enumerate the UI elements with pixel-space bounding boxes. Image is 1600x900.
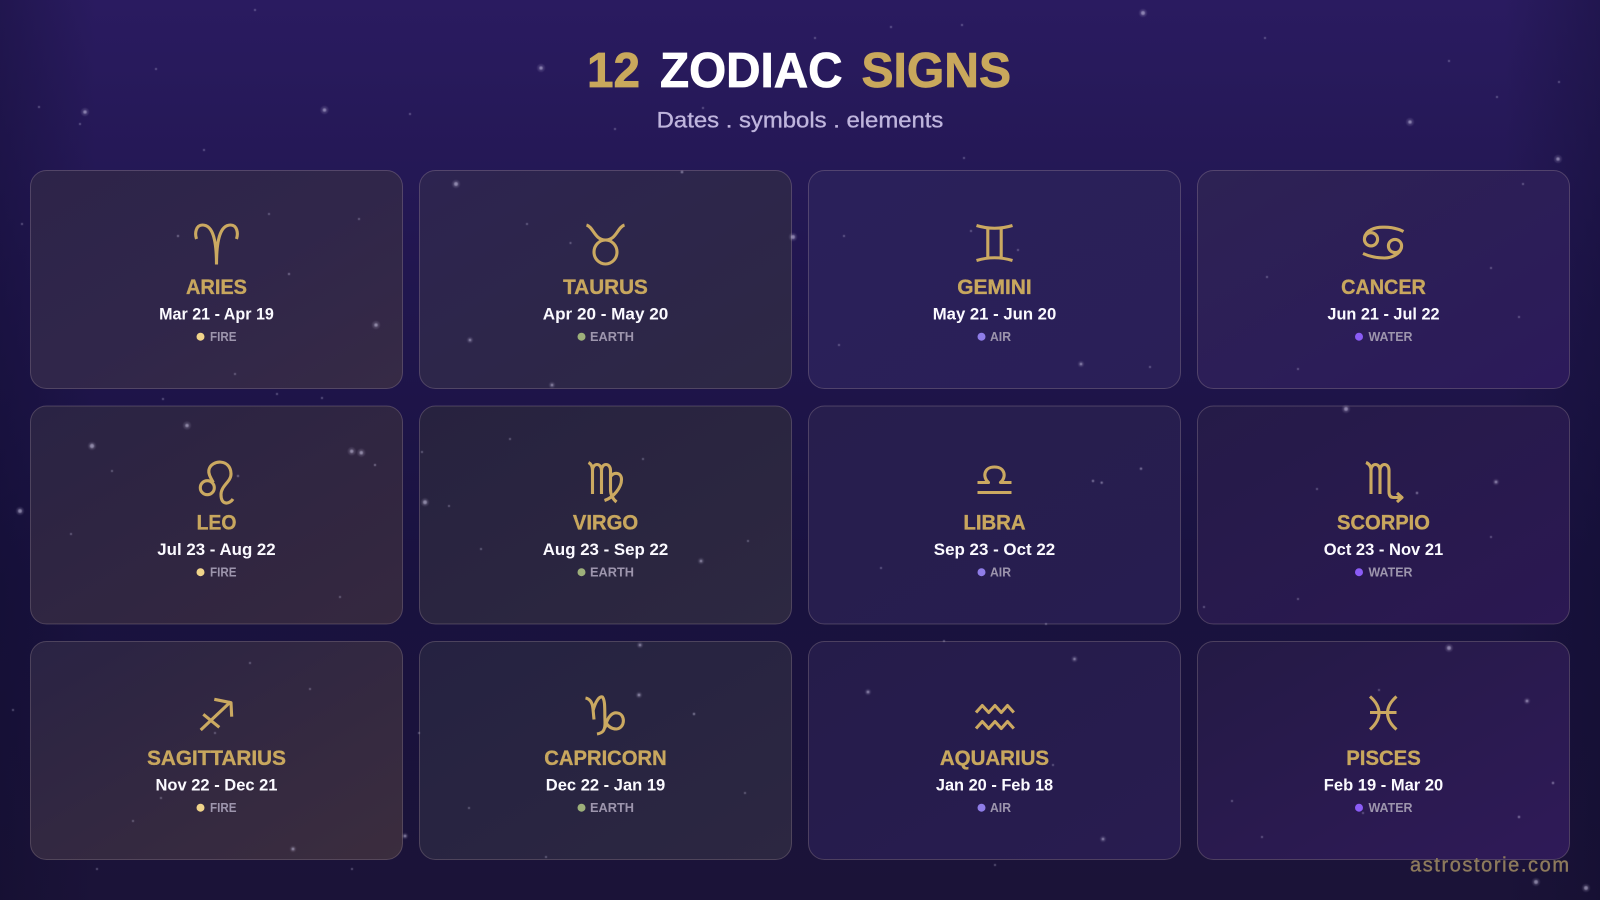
card background xyxy=(808,170,1180,388)
icon: Aquarius symbol xyxy=(976,706,1014,728)
icon: Capricorn symbol xyxy=(586,697,623,734)
panel: Cancer xyxy=(1198,170,1570,388)
element tag: EARTH xyxy=(590,801,634,815)
date range: May 21 - Jun 20 xyxy=(933,305,1056,324)
element tag xyxy=(196,566,236,580)
title: 12 xyxy=(587,43,640,98)
card background xyxy=(420,406,792,624)
sign name: VIRGO xyxy=(573,512,638,534)
subtitle: Dates . symbols . elements xyxy=(657,108,943,133)
element tag xyxy=(978,566,1011,580)
card background xyxy=(30,642,402,860)
element tag xyxy=(196,330,236,344)
sign name: AQUARIUS xyxy=(940,747,1049,770)
icon: Taurus symbol xyxy=(586,225,624,264)
panel: Taurus xyxy=(420,170,792,388)
date range: Dec 22 - Jan 19 xyxy=(546,776,665,795)
sign name: TAURUS xyxy=(563,276,648,299)
title xyxy=(587,43,1011,98)
title: ZODIAC xyxy=(660,43,842,98)
panel: Sagittarius xyxy=(30,642,402,860)
element tag: EARTH xyxy=(590,330,634,344)
icon: Aries symbol xyxy=(196,225,237,264)
element tag: WATER xyxy=(1368,801,1412,815)
element tag: FIRE xyxy=(210,330,236,344)
icon: Gemini symbol xyxy=(976,226,1012,260)
date range: Oct 23 - Nov 21 xyxy=(1324,540,1443,559)
icon: Sagittarius symbol xyxy=(201,699,232,730)
element tag xyxy=(978,801,1011,815)
date range: Aug 23 - Sep 22 xyxy=(543,540,668,559)
date range: Jun 21 - Jul 22 xyxy=(1327,305,1440,324)
sign name: LIBRA xyxy=(963,512,1026,534)
element tag: WATER xyxy=(1368,566,1412,580)
sign name: CAPRICORN xyxy=(544,747,667,770)
sign name: PISCES xyxy=(1346,747,1421,770)
card background xyxy=(30,170,402,388)
title: SIGNS xyxy=(862,43,1011,98)
icon: Cancer symbol xyxy=(1363,227,1404,258)
date range: Sep 23 - Oct 22 xyxy=(934,540,1055,559)
sign name: LEO xyxy=(197,512,236,534)
panel: Leo xyxy=(30,406,402,624)
panel: Aries xyxy=(30,170,402,388)
panel: Scorpio xyxy=(1198,406,1570,624)
card background xyxy=(420,170,792,388)
element tag xyxy=(196,801,236,815)
panel: Capricorn xyxy=(420,642,792,860)
icon: Scorpio symbol xyxy=(1366,462,1402,502)
icon: Pisces symbol xyxy=(1370,696,1396,730)
icon: Leo symbol xyxy=(200,462,233,503)
panel: Virgo xyxy=(420,406,792,624)
panel: Libra xyxy=(808,406,1180,624)
element tag xyxy=(978,330,1011,344)
panel: Gemini xyxy=(808,170,1180,388)
element tag: FIRE xyxy=(210,566,236,580)
panel: Pisces xyxy=(1198,642,1570,860)
sign name: SAGITTARIUS xyxy=(147,747,286,770)
element tag: AIR xyxy=(990,566,1011,580)
card background xyxy=(808,642,1180,860)
element tag: AIR xyxy=(990,330,1011,344)
date range: Apr 20 - May 20 xyxy=(543,305,668,324)
card background xyxy=(30,406,402,624)
element tag: FIRE xyxy=(210,801,236,815)
watermark: astrostorie.com xyxy=(1410,855,1569,877)
card background xyxy=(420,642,792,860)
date range: Mar 21 - Apr 19 xyxy=(159,305,274,324)
sign name: GEMINI xyxy=(957,276,1032,299)
date range: Jul 23 - Aug 22 xyxy=(157,540,276,559)
card background xyxy=(1198,406,1570,624)
sign name: ARIES xyxy=(186,276,247,299)
element tag: EARTH xyxy=(590,566,634,580)
date range: Jan 20 - Feb 18 xyxy=(936,776,1053,795)
date range: Nov 22 - Dec 21 xyxy=(156,776,278,795)
card background xyxy=(1198,642,1570,860)
sign name: CANCER xyxy=(1341,276,1426,299)
card background xyxy=(808,406,1180,624)
date range: Feb 19 - Mar 20 xyxy=(1324,776,1443,795)
element tag: AIR xyxy=(990,801,1011,815)
panel: Aquarius xyxy=(808,642,1180,860)
icon: Virgo symbol xyxy=(588,462,622,502)
sign name: SCORPIO xyxy=(1337,512,1430,534)
element tag: WATER xyxy=(1368,330,1412,344)
card background xyxy=(1198,170,1570,388)
icon: Libra symbol xyxy=(978,467,1012,492)
